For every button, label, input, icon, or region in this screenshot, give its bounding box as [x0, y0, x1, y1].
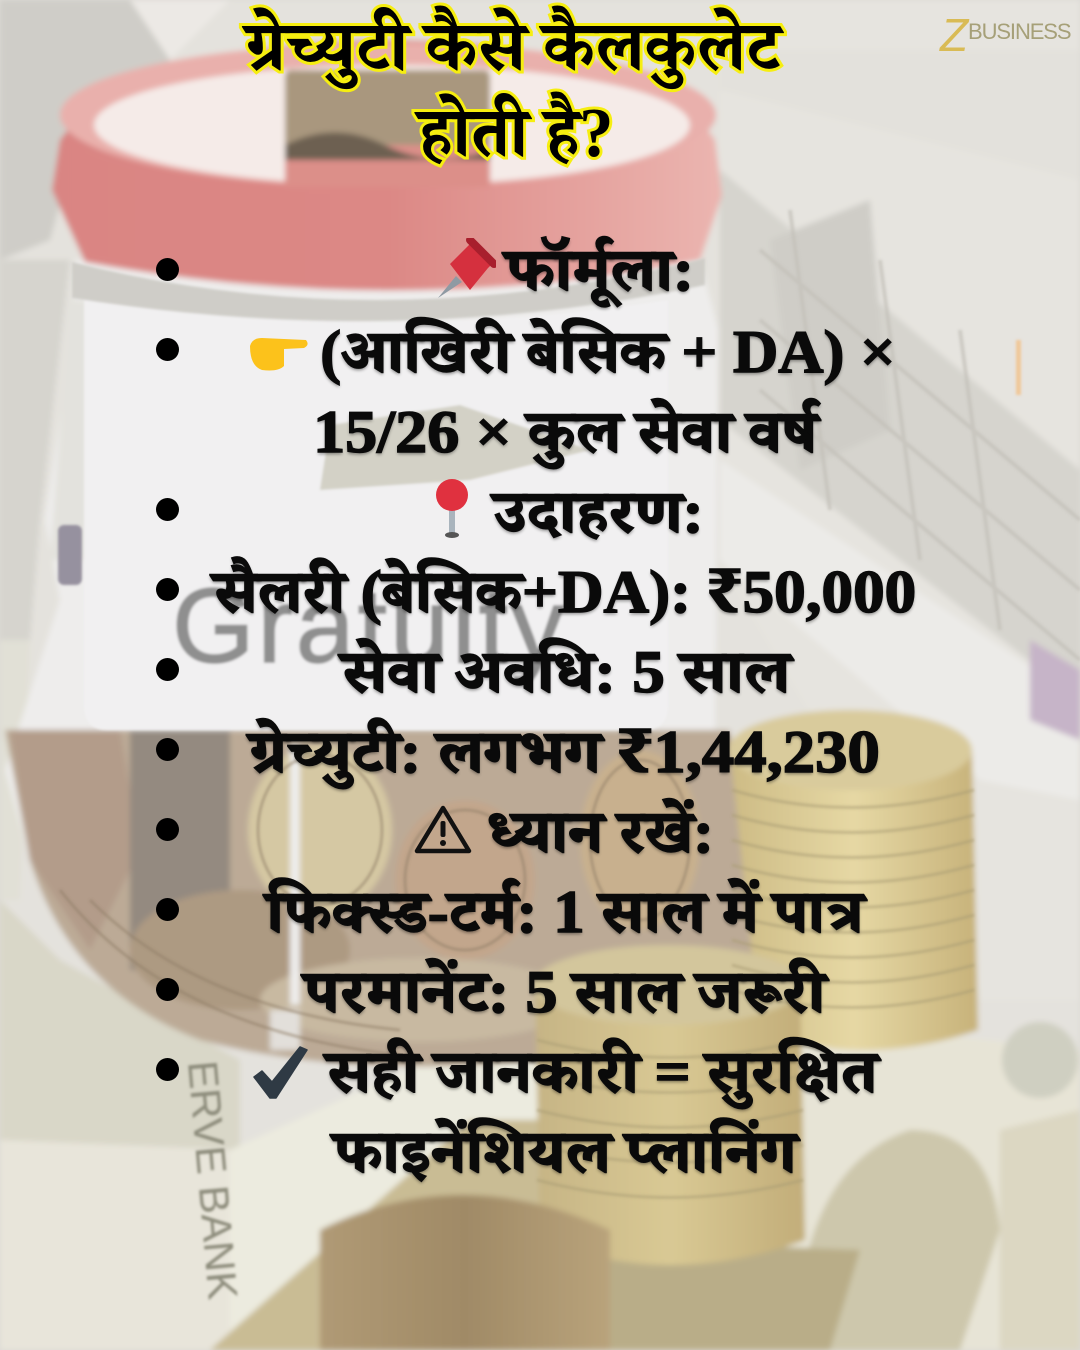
bottom-left note [0, 900, 240, 1150]
bullet list [208, 236, 916, 1185]
lower right note with portrait [790, 1020, 1080, 1350]
bullet dots [156, 258, 496, 1092]
middle coin stack [535, 980, 805, 1265]
jar label [58, 210, 1080, 1302]
icon: pointing hand [250, 338, 308, 370]
line: formula heading: फॉर्मूला: [506, 237, 694, 303]
dark bottom coin stack [320, 1195, 610, 1350]
left notes [0, 0, 170, 260]
diagonal note [230, 1010, 540, 1350]
coin in slot [285, 70, 490, 150]
icon: round pin [436, 479, 468, 538]
icon: pushpin [438, 238, 496, 298]
icon: check mark [253, 1046, 308, 1099]
right coin stack [730, 750, 978, 1050]
jar label: Gratuity [172, 567, 564, 685]
line: example heading: उदाहरण: [494, 479, 704, 545]
line: gratuity amount: ग्रेच्युटी: लगभग ₹1,44,230 [250, 719, 880, 785]
line: service period: सेवा अवधि: 5 साल [342, 639, 790, 705]
line: conclusion continued: फाइनेंशियल प्लानिंग [334, 1119, 796, 1185]
jar [5, 260, 760, 1067]
line: keep in mind: ध्यान रखें: [488, 799, 714, 865]
icon: warning triangle [414, 806, 472, 854]
lid [52, 40, 722, 291]
line: permanent: परमानेंट: 5 साल जरूरी [305, 959, 825, 1025]
logo: Z Business: BUSINESS [968, 19, 1070, 44]
right notes [720, 0, 1080, 1000]
line: formula: (आखिरी बेसिक + DA) × [320, 319, 896, 385]
title: होती है? [419, 95, 613, 172]
line: formula continued: 15/26 × कुल सेवा वर्ष [313, 399, 817, 465]
line: conclusion: सही जानकारी = सुरक्षित [327, 1039, 877, 1105]
line: salary: सैलरी (बेसिक+DA): ₹50,000 [214, 559, 916, 625]
logo: Z Business: Z [940, 9, 968, 61]
title [238, 2, 787, 172]
jar label: ERVE BANK [179, 1059, 247, 1302]
line: fixed term: फिक्स्ड-टर्म: 1 साल में पात्र [267, 879, 863, 945]
left stripes of jar shoulder [50, 300, 100, 560]
logo: Z Business [939, 9, 1070, 61]
title: ग्रेच्युटी कैसे कैलकुलेट [246, 9, 780, 86]
